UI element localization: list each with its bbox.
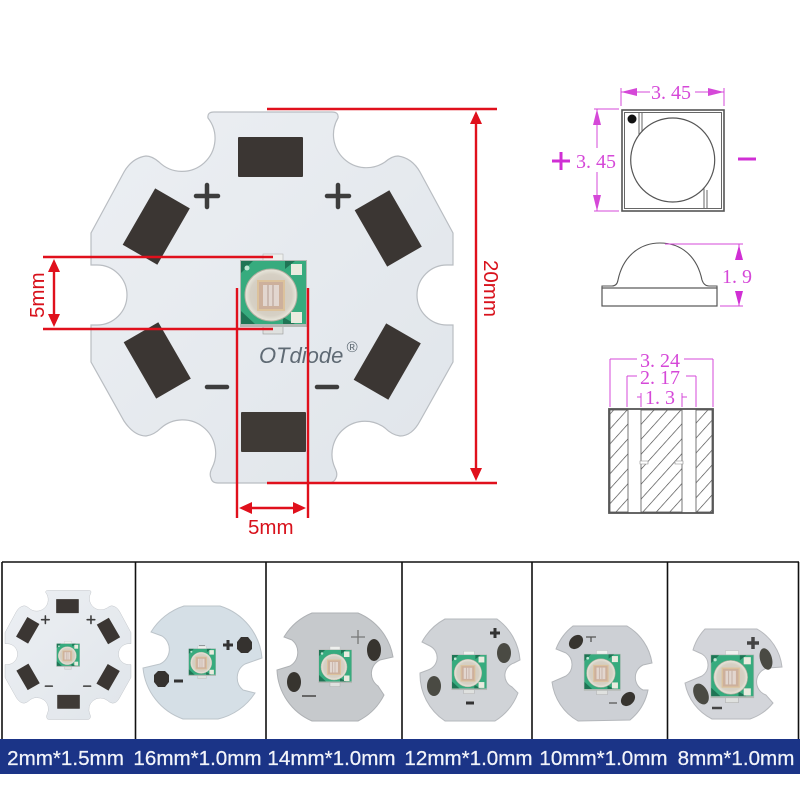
dimension: 5mm width, bottom xyxy=(237,288,308,539)
banner: size labels: 16mm*1.0mm xyxy=(133,747,262,770)
option: 10mm board xyxy=(552,626,652,721)
banner: size labels: 14mm*1.0mm xyxy=(267,747,396,770)
dimension: 2.17 xyxy=(627,367,696,407)
dimension: 3.45 height: 3. 45 xyxy=(576,151,616,173)
dimension: 1.3 xyxy=(637,387,687,409)
dimension: 5mm height, left xyxy=(26,257,273,329)
drawing: LED bottom view xyxy=(609,350,713,513)
option: 8mm board xyxy=(685,629,782,719)
dimension: 5mm width, bottom: 5mm xyxy=(248,516,294,539)
drawing: LED top view xyxy=(576,82,724,211)
banner: size labels xyxy=(0,739,800,774)
option: 14mm board xyxy=(277,613,393,721)
dimension: 3.24: 3. 24 xyxy=(640,350,680,372)
dimension: 3.45 height xyxy=(576,109,619,211)
dimension: 20mm height, right: 20mm xyxy=(479,260,502,317)
watermark: OTdiode: OTdiode xyxy=(259,343,343,368)
icon: LED emitter xyxy=(240,254,307,334)
dimension: 3.45 width xyxy=(621,82,724,106)
dimension: 1.9: 1. 9 xyxy=(722,266,752,288)
option: 12mm board xyxy=(420,619,520,721)
dimension: 1.3: 1. 3 xyxy=(645,387,675,409)
main star board photo xyxy=(91,112,453,483)
dimension: 1.9 xyxy=(665,244,752,306)
banner: size labels: 10mm*1.0mm xyxy=(539,747,668,770)
dimension: 2.17: 2. 17 xyxy=(640,367,680,389)
banner: size labels: 8mm*1.0mm xyxy=(678,747,794,770)
dimension: 3.45 width: 3. 45 xyxy=(651,82,691,104)
option: 20mm star board xyxy=(5,590,131,720)
banner: size labels: 12mm*1.0mm xyxy=(404,747,533,770)
dimension: 20mm height, right xyxy=(267,109,502,483)
banner: size labels: 2mm*1.5mm xyxy=(7,747,124,770)
drawing: LED side view xyxy=(602,243,752,306)
option: 16mm board xyxy=(143,606,262,719)
watermark: OTdiode: ® xyxy=(346,339,358,356)
panel frames: size options xyxy=(2,562,799,739)
polarity marks xyxy=(552,152,756,170)
dimension: 3.24 xyxy=(610,350,713,407)
dimension: 5mm height, left: 5mm xyxy=(26,272,49,318)
